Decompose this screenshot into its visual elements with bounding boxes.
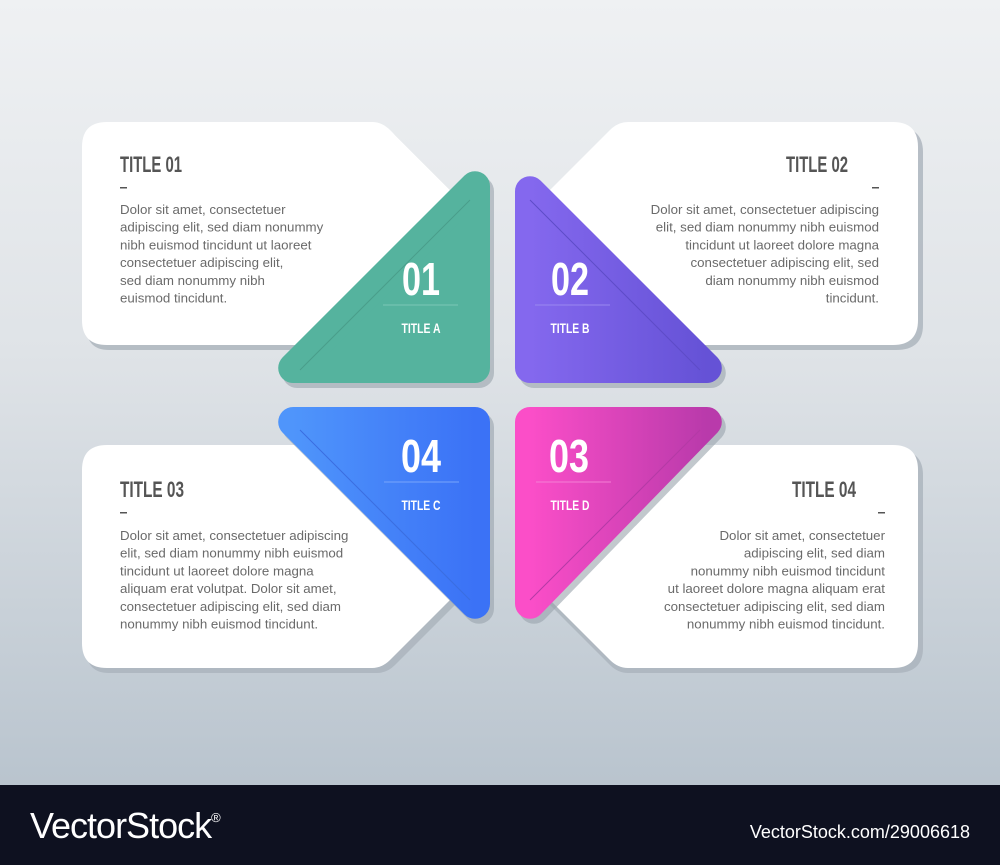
footer logo: ® <box>211 810 221 825</box>
number 02: 02 <box>551 253 589 305</box>
number 04: 04 <box>401 430 441 482</box>
text block: card 03: aliquam erat volutpat. Dolor sit amet, <box>120 581 337 596</box>
label: title A: TITLE A <box>402 320 440 336</box>
heading: title 01: TITLE 01 <box>120 152 182 177</box>
text block: card 01: consectetuer adipiscing elit, <box>120 255 283 270</box>
triangle 01 green <box>293 186 475 370</box>
heading: title 04: TITLE 04 <box>792 477 857 502</box>
card shadows <box>86 127 923 673</box>
text block: card 02: diam nonummy nibh euismod <box>705 273 879 288</box>
footer <box>0 785 1000 865</box>
text block: card 02: Dolor sit amet, consectetuer adipiscing <box>651 202 879 217</box>
panel: card 02 <box>530 122 918 345</box>
triangle 02 purple <box>530 191 707 370</box>
text block: card 02: elit, sed diam nonummy nibh euismod <box>656 220 879 235</box>
heading: title 03: TITLE 03 <box>120 477 184 502</box>
number 03: 03 <box>549 430 589 482</box>
text block: card 03: elit, sed diam nonummy nibh euismod <box>120 546 343 561</box>
label: title C: TITLE C <box>402 497 440 513</box>
text block: card 02: consectetuer adipiscing elit, sed <box>691 255 879 270</box>
text block: card 04: adipiscing elit, sed diam <box>744 546 885 561</box>
panel: card 04 <box>530 445 918 668</box>
text block: card 01: sed diam nonummy nibh <box>120 273 265 288</box>
text block: card 04: consectetuer adipiscing elit, sed diam <box>664 599 885 614</box>
text block: card 02: tincidunt. <box>826 290 879 306</box>
text block: card 01: nibh euismod tincidunt ut laoreet <box>120 237 312 252</box>
text block: card 04: Dolor sit amet, consectetuer <box>719 528 886 543</box>
text block: card 03: consectetuer adipiscing elit, sed diam <box>120 599 341 614</box>
text block: card 04: nonummy nibh euismod tincidunt <box>691 563 885 578</box>
text block: card 03: Dolor sit amet, consectetuer adipiscing <box>120 528 348 543</box>
text block: card 04: ut laoreet dolore magna aliquam erat <box>668 581 885 596</box>
text block: card 01: Dolor sit amet, consectetuer <box>120 202 286 217</box>
triangle 04 blue <box>293 422 475 604</box>
label: title D: TITLE D <box>550 497 590 513</box>
panel: card 03 <box>82 445 470 668</box>
text block: card 04: nonummy nibh euismod tincidunt. <box>687 616 885 632</box>
text block: card 03: nonummy nibh euismod tincidunt. <box>120 616 318 632</box>
footer url: VectorStock.com/29006618 <box>750 822 970 842</box>
label: title B: TITLE B <box>550 320 590 336</box>
text block: card 01: adipiscing elit, sed diam nonummy <box>120 220 324 235</box>
text block: card 01: euismod tincidunt. <box>120 290 227 306</box>
text block: card 02: tincidunt ut laoreet dolore magna <box>685 237 880 252</box>
footer logo: VectorStock <box>30 805 211 846</box>
panel: card 01 <box>82 122 470 345</box>
triangle shadows <box>297 191 711 609</box>
heading: title 02: TITLE 02 <box>786 152 848 177</box>
triangle 03 pink <box>530 422 707 604</box>
text block: card 03: tincidunt ut laoreet dolore magna <box>120 563 314 578</box>
number 01: 01 <box>402 253 440 305</box>
